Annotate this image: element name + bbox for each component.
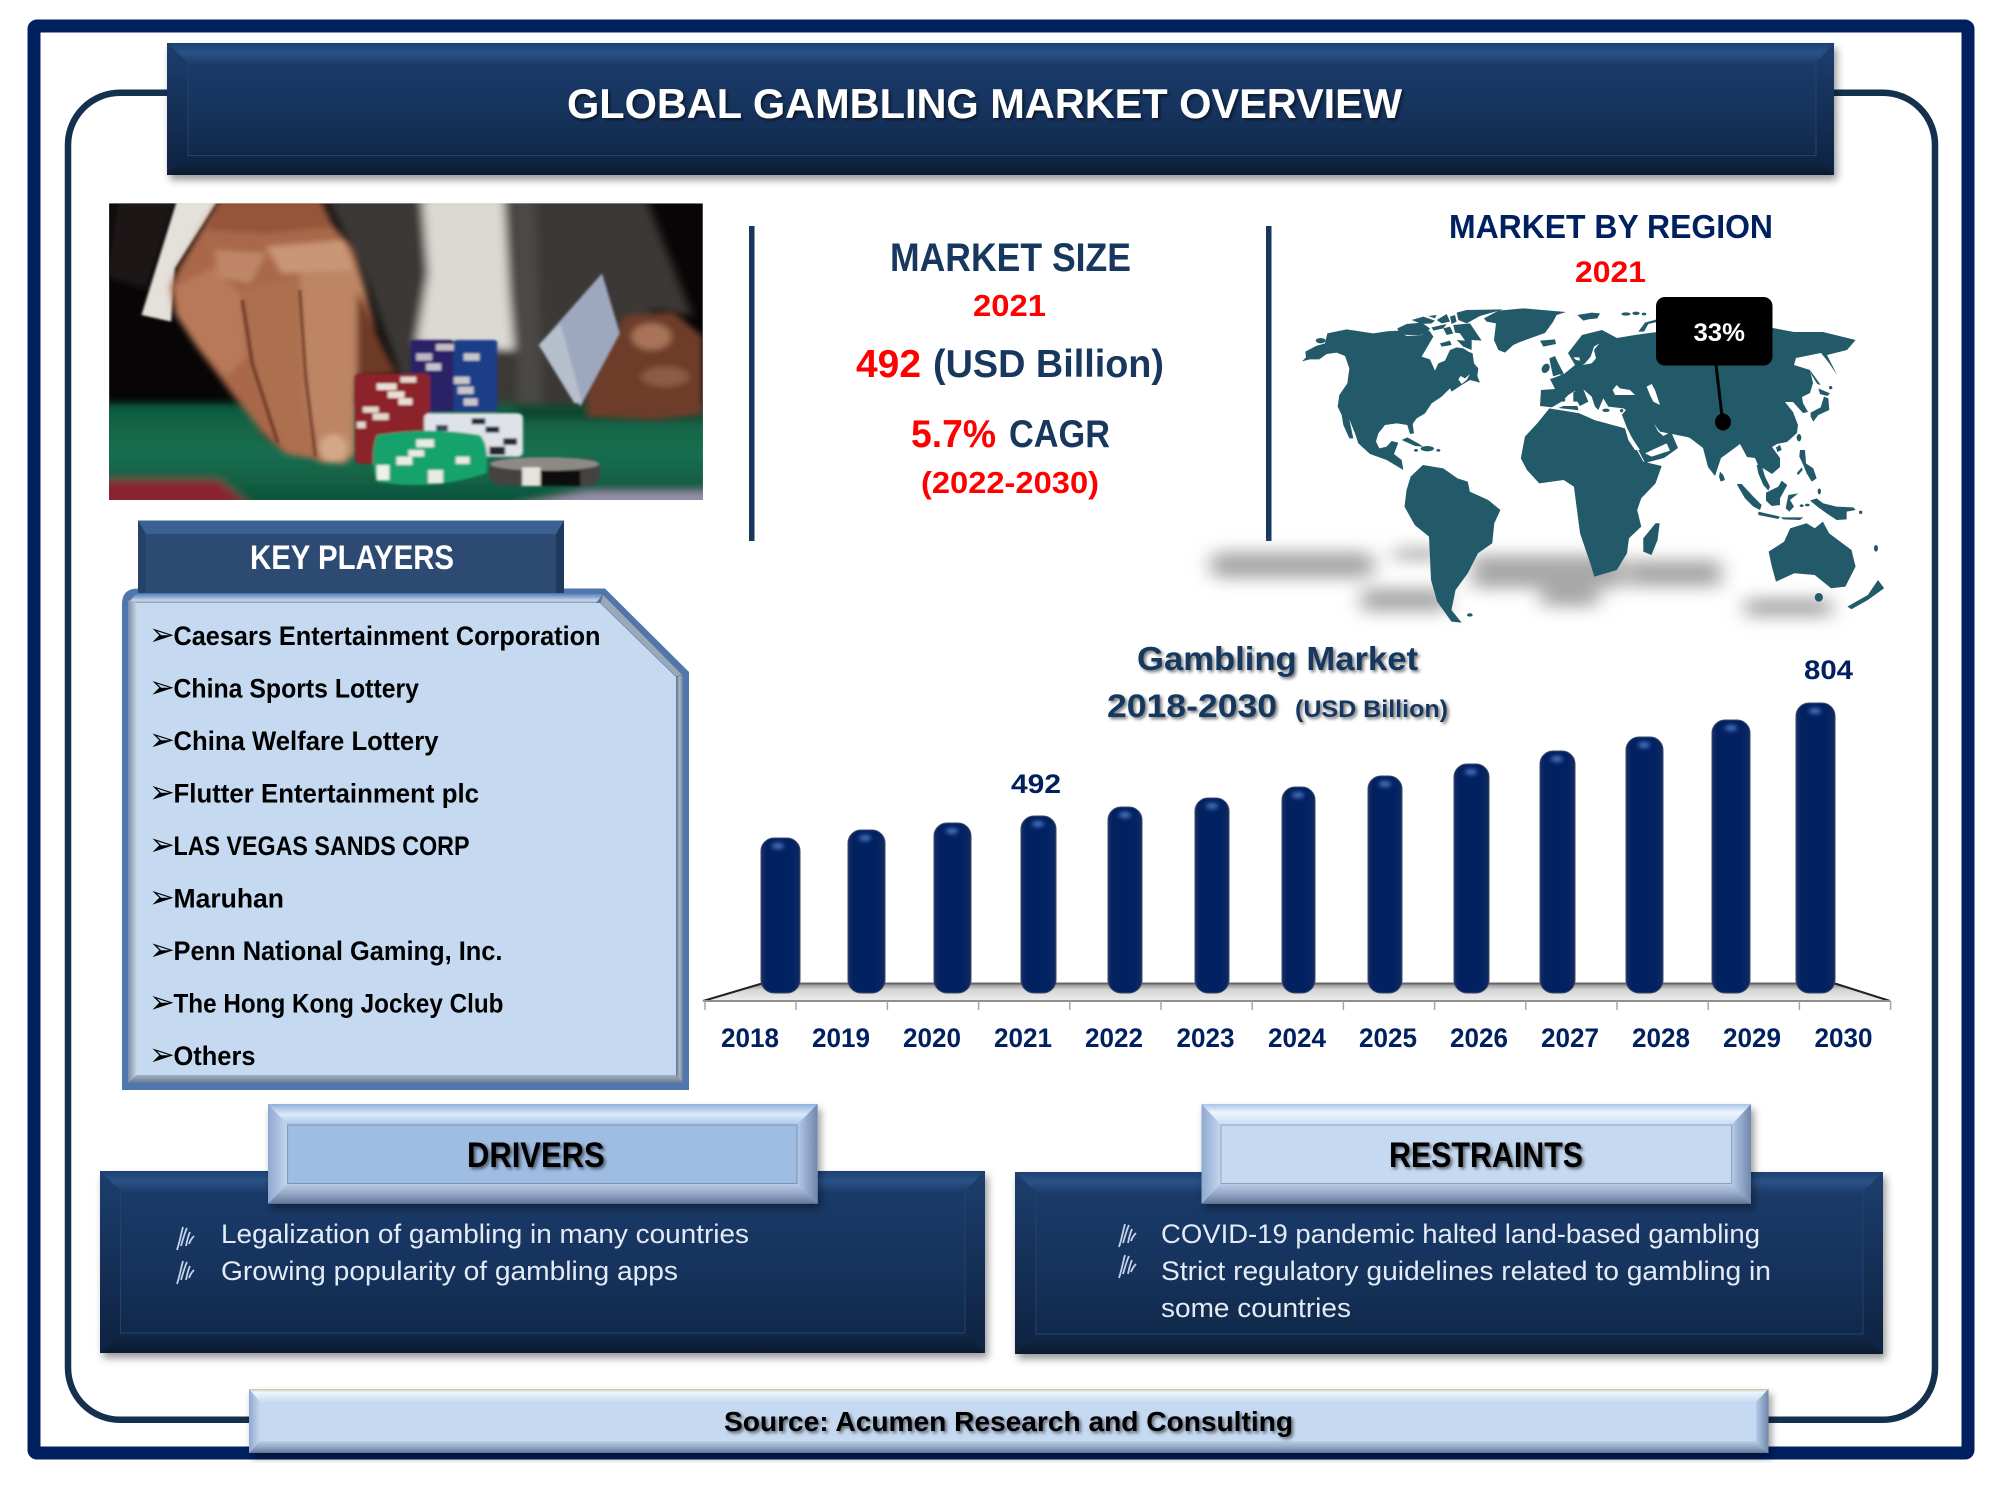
market size heading: MARKET SIZE <box>890 236 1131 280</box>
callout: 33% share: 33% <box>1694 319 1745 347</box>
key players list: ➢ <box>149 722 175 758</box>
icon: restraint bullet 2 <box>1119 1255 1136 1278</box>
eurasia <box>1540 320 1856 476</box>
key players list: Maruhan <box>174 884 284 914</box>
map ground shadow <box>1211 548 1831 617</box>
panel: market size <box>856 236 1164 500</box>
key players list: LAS VEGAS SANDS CORP <box>174 831 470 861</box>
heading tab: key players <box>138 521 564 593</box>
bevel top <box>128 594 603 603</box>
x axis labels: 2019 <box>812 1023 870 1053</box>
x axis labels: 2023 <box>1176 1023 1234 1053</box>
restraint item 1: COVID-19 pandemic halted land-based gambling <box>1161 1219 1760 1249</box>
bar chart <box>703 655 1891 1053</box>
restraint item 2: some countries <box>1161 1293 1351 1323</box>
world map <box>1211 308 1884 623</box>
key players list: ➢ <box>149 774 175 810</box>
x axis labels: 2022 <box>1085 1023 1143 1053</box>
heading tab: restraints <box>1202 1104 1751 1204</box>
data label 2030: 804 <box>1804 655 1853 685</box>
key players list: ➢ <box>149 670 175 706</box>
x axis labels: 2025 <box>1359 1023 1417 1053</box>
market size value: 492 <box>856 343 921 386</box>
north america and arctic <box>1302 308 1566 470</box>
restraint item 2: Strict regulatory guidelines related to gambling in <box>1161 1256 1771 1286</box>
key players list: Caesars Entertainment Corporation <box>174 621 600 651</box>
x axis labels: 2030 <box>1814 1023 1872 1053</box>
key players list: ➢ <box>149 984 175 1020</box>
icon: driver bullet 1 <box>177 1227 194 1250</box>
key players list: China Welfare Lottery <box>174 726 438 756</box>
CAGR period: (2022-2030) <box>921 465 1099 500</box>
x axis labels: 2027 <box>1541 1023 1599 1053</box>
heading tab: drivers: DRIVERS <box>467 1136 605 1175</box>
bars <box>761 703 1835 993</box>
europe islands <box>1540 312 1658 377</box>
africa south america australia <box>1405 408 1884 623</box>
x axis labels: 2029 <box>1723 1023 1781 1053</box>
asian islands <box>1719 370 1862 520</box>
key players list: Flutter Entertainment plc <box>174 778 479 808</box>
divider: market size right <box>1266 226 1272 541</box>
key players list: Penn National Gaming, Inc. <box>174 936 502 966</box>
key players list: The Hong Kong Jockey Club <box>174 988 504 1018</box>
panel: drivers <box>100 1171 985 1353</box>
x axis labels <box>721 1023 1872 1053</box>
x axis labels: 2026 <box>1450 1023 1508 1053</box>
panel: key players <box>122 588 689 1090</box>
heading tab: drivers <box>268 1104 818 1204</box>
key players list: ➢ <box>149 1037 175 1073</box>
source bar <box>249 1389 1768 1453</box>
x axis labels: 2028 <box>1632 1023 1690 1053</box>
key players list: ➢ <box>149 880 175 916</box>
chart title: (USD Billion) <box>1295 696 1448 723</box>
driver item 2: Growing popularity of gambling apps <box>221 1256 678 1286</box>
x axis labels: 2024 <box>1268 1023 1326 1053</box>
key players list <box>149 617 600 1073</box>
market size year: 2021 <box>973 288 1046 323</box>
CAGR value: 5.7% <box>911 413 996 456</box>
chart title <box>1107 640 1448 724</box>
chart title: Gambling Market <box>1137 640 1418 677</box>
bevel bottom <box>128 1075 683 1083</box>
data label 2021: 492 <box>1011 769 1061 799</box>
callout: 33% share <box>1656 297 1772 430</box>
key players list: Others <box>174 1041 256 1071</box>
region year: 2021 <box>1575 256 1646 289</box>
x axis labels: 2021 <box>994 1023 1052 1053</box>
divider: market size left <box>749 226 754 541</box>
chart title: 2018-2030 <box>1107 688 1277 724</box>
x axis labels: 2020 <box>903 1023 961 1053</box>
key players list: ➢ <box>149 932 175 968</box>
bevel left <box>128 600 137 1083</box>
x axis labels: 2018 <box>721 1023 779 1053</box>
heading: market by region: MARKET BY REGION <box>1449 209 1773 246</box>
icon: restraint bullet 1 <box>1119 1224 1136 1247</box>
market size unit: (USD Billion) <box>933 343 1164 386</box>
source bar: Source: Acumen Research and Consulting <box>724 1406 1293 1437</box>
bevel cut corner <box>600 594 683 677</box>
photo: hand placing casino chips <box>109 203 703 500</box>
panel: restraints <box>1015 1172 1883 1354</box>
key players list: ➢ <box>149 617 175 653</box>
bevel right <box>676 675 683 1083</box>
icon: driver bullet 2 <box>177 1261 194 1284</box>
key players list: China Sports Lottery <box>174 674 419 704</box>
driver item 1: Legalization of gambling in many countries <box>221 1219 749 1249</box>
restraint item 2 <box>1161 1256 1771 1323</box>
heading tab: restraints: RESTRAINTS <box>1389 1136 1583 1175</box>
title text: GLOBAL GAMBLING MARKET OVERVIEW <box>567 80 1402 127</box>
title banner <box>167 43 1834 175</box>
heading tab: key players: KEY PLAYERS <box>250 539 454 577</box>
key players list: ➢ <box>149 827 175 863</box>
seas and gulfs <box>1550 343 1670 457</box>
CAGR label: CAGR <box>1009 413 1110 456</box>
